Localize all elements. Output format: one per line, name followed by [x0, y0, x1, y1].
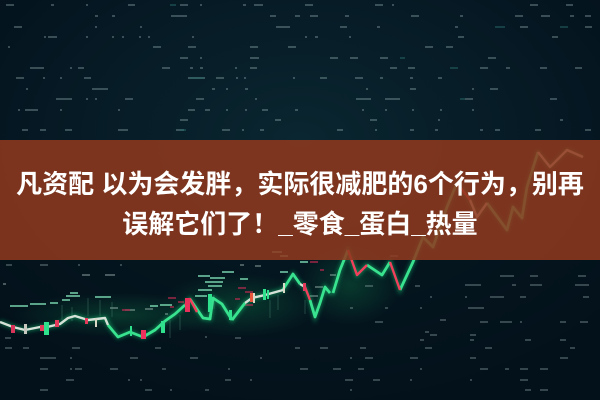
candles: [11, 283, 306, 339]
title: 误解它们了！_零食_蛋白_热量: [122, 209, 478, 239]
candlestick price line glow: [0, 150, 583, 337]
title: 凡资配 以为会发胖，实际很减肥的6个行为，别再: [16, 169, 584, 199]
data ticker dashes: bottom area: [3, 252, 589, 390]
candlestick price line: [0, 150, 583, 339]
data ticker dashes: top area: [6, 5, 592, 130]
title band: [0, 140, 600, 260]
title: [16, 169, 584, 239]
